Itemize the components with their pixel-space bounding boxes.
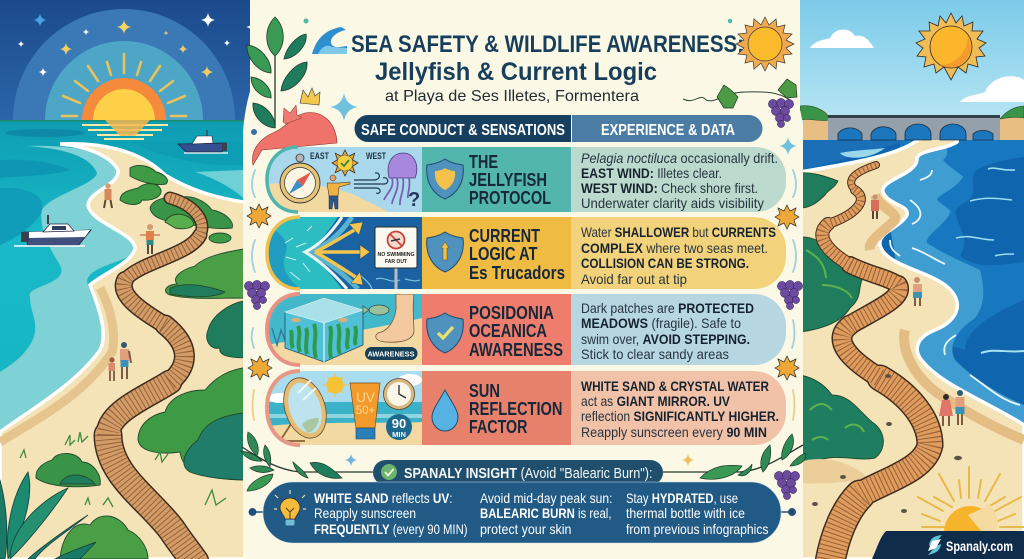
row text: Pelagia noctiluca occasionally drift. <box>581 150 778 166</box>
row 1 left arc <box>267 147 298 212</box>
panel: row 2 current logic <box>267 217 786 290</box>
awareness tag <box>365 347 418 360</box>
column heading left: SAFE CONDUCT & SENSATIONS <box>361 122 565 139</box>
sand pebbles <box>812 374 962 513</box>
row text <box>581 224 776 287</box>
insight column 3: Stay HYDRATED, use <box>626 490 738 506</box>
night sky with sun <box>0 0 260 120</box>
title line 2: Jellyfish & Current Logic <box>375 58 657 86</box>
row heading <box>469 225 565 283</box>
no swimming sign <box>375 227 417 290</box>
sand right <box>800 136 1024 559</box>
boat upper right <box>178 130 228 153</box>
icon: check circle <box>381 464 397 480</box>
icon: wave <box>312 27 347 54</box>
central cream panel <box>243 0 803 559</box>
insight column 1: Reapply sunscreen <box>314 505 416 521</box>
row 2 left arc <box>267 217 300 289</box>
side ornaments: small suns and grapes <box>244 204 803 500</box>
insight column 2 <box>480 490 612 537</box>
insight column 2: BALEARIC BURN is real, <box>480 505 612 521</box>
icon: shield gold <box>427 159 463 199</box>
icon: bare foot <box>376 294 414 342</box>
icon: top sun <box>736 17 794 71</box>
row text: Reapply sunscreen every 90 MIN <box>581 424 767 440</box>
illustration: mirror sunscreen clock <box>267 371 422 445</box>
icon: sunscreen tube <box>350 383 380 439</box>
icon: compass <box>280 154 320 203</box>
shallow water <box>0 146 135 432</box>
insight heading pill <box>373 460 663 485</box>
row heading: JELLYFISH <box>469 169 547 190</box>
column heading right: EXPERIENCE & DATA <box>601 122 735 139</box>
row heading: OCEANICA <box>469 320 547 341</box>
beach figures left <box>104 183 160 381</box>
badge: 90 min: 90 <box>392 416 406 431</box>
row text: Underwater clarity aids visibility <box>581 195 764 211</box>
daylight sky <box>800 0 1024 124</box>
shore grass tufts <box>20 432 226 507</box>
insight column 2: protect your skin <box>480 521 572 537</box>
row heading <box>469 302 563 360</box>
panel sparkles and dots <box>251 18 797 466</box>
insight heading text: SPANALY INSIGHT (Avoid "Balearic Burn"): <box>404 466 652 482</box>
icon: shield arrow <box>427 232 463 272</box>
insight column 1: FREQUENTLY (every 90 MIN) <box>314 521 468 537</box>
insight column 3 <box>626 490 768 537</box>
illustration: compass wind jellyfish: WEST <box>366 151 386 161</box>
left scene: sunset beach <box>0 0 260 559</box>
row heading: THE <box>469 151 498 172</box>
row text: WHITE SAND & CRYSTAL WATER <box>581 378 769 394</box>
sand spit <box>0 144 250 559</box>
brand badge <box>872 531 1024 559</box>
row text: Dark patches are PROTECTED <box>581 300 754 316</box>
row text: act as GIANT MIRROR. UV <box>581 393 731 409</box>
row text: EAST WIND: Illetes clear. <box>581 165 722 181</box>
title block <box>312 27 744 105</box>
row heading: LOGIC AT <box>469 243 538 264</box>
bottom olive branches <box>241 432 806 491</box>
row text: COMPLEX where two seas meet. <box>581 240 768 256</box>
sun rising bottom right <box>918 467 1024 532</box>
row heading: SUN <box>469 380 500 401</box>
left bushes <box>36 165 250 559</box>
insight column 3: thermal bottle with ice <box>626 505 745 521</box>
awareness tag: AWARENESS <box>368 350 414 358</box>
no swimming sign: NO SWIMMING <box>378 252 414 258</box>
right bushes <box>800 173 883 484</box>
icon: person pointing <box>327 175 350 209</box>
row heading: REFLECTION <box>469 398 562 419</box>
row heading: AWARENESS <box>469 339 563 360</box>
row text <box>581 150 778 211</box>
row 3 left arc <box>267 294 300 365</box>
badge: 90 min: MIN <box>392 430 406 439</box>
boat lower left <box>14 215 91 246</box>
icon: shield check <box>427 313 463 353</box>
panel: row 1 jellyfish protocol <box>267 147 786 212</box>
title line 1: SEA SAFETY & WILDLIFE AWARENESS: <box>351 31 744 58</box>
row text: Avoid far out at tip <box>581 271 687 287</box>
insight column 3: from previous infographics <box>626 521 768 537</box>
icon: three arrows <box>315 228 364 280</box>
icon: wind lines <box>354 173 388 193</box>
decorative olive branch <box>247 17 307 128</box>
row heading <box>469 151 551 208</box>
icon: standing mirror <box>276 372 334 444</box>
badge: 90 min <box>386 414 412 440</box>
table header bar <box>354 115 762 142</box>
icon: sunscreen tube: UV <box>356 390 375 405</box>
row text: reflection SIGNIFICANTLY HIGHER. <box>581 408 779 424</box>
row heading: FACTOR <box>469 416 528 437</box>
right boardwalk <box>822 165 930 559</box>
row text: WEST WIND: Check shore first. <box>581 180 758 196</box>
illustration: compass wind jellyfish <box>267 147 422 212</box>
row text <box>581 378 779 440</box>
sun with spikes <box>916 13 986 80</box>
agave plant <box>0 472 96 559</box>
title line 3: at Playa de Ses Illetes, Formentera <box>385 88 639 105</box>
row heading: Es Trucadors <box>469 262 565 283</box>
question mark: ? <box>408 189 420 211</box>
insight column 2: Avoid mid-day peak sun: <box>480 490 612 506</box>
icon: jellyfish <box>384 153 417 205</box>
wind direction labels: EAST <box>310 151 329 161</box>
icon: fish <box>363 305 389 315</box>
glass tank with seagrass <box>285 298 363 362</box>
panel: row 3 posidonia <box>267 294 786 365</box>
icon: sunscreen tube: 50+ <box>356 405 376 417</box>
row heading: POSIDONIA <box>469 302 554 323</box>
icon: vine and grapes <box>683 79 797 128</box>
icon: sun with check <box>332 150 358 176</box>
insight column 1 <box>314 490 468 537</box>
right scene: bay with bridge <box>800 0 1024 559</box>
row heading: CURRENT <box>469 225 541 246</box>
row text: Water SHALLOWER but CURRENTS <box>581 224 776 240</box>
connector dots <box>249 509 795 515</box>
illustration: tank and foot <box>267 294 422 365</box>
row text: COLLISION CAN BE STRONG. <box>581 255 749 271</box>
sea right <box>800 140 1024 440</box>
cliffs <box>800 106 1024 140</box>
row text: swim over, AVOID STEPPING. <box>581 331 750 347</box>
row text: MEADOWS (fragile). Safe to <box>581 315 741 331</box>
icon: lightbulb <box>274 490 306 526</box>
red blob and crown <box>252 88 337 165</box>
insight column 1: WHITE SAND reflects UV: <box>314 490 452 506</box>
no swimming sign: FAR OUT <box>385 259 408 265</box>
row heading: PROTOCOL <box>469 187 551 208</box>
side arc marks <box>252 170 796 420</box>
panel: row 4 sun reflection <box>267 371 786 445</box>
bridge <box>828 115 1000 140</box>
row text <box>581 300 754 362</box>
icon: clock <box>384 378 414 410</box>
clouds <box>810 29 1024 102</box>
icon: small sun <box>323 373 347 397</box>
row heading <box>469 380 562 437</box>
icon: water drop <box>432 390 458 431</box>
panel: insight box <box>263 482 781 543</box>
sea <box>0 120 244 372</box>
row text: Stick to clear sandy areas <box>581 346 729 362</box>
beach figures right <box>871 194 964 426</box>
illustration: currents and sign <box>267 217 422 290</box>
left boardwalk <box>108 198 202 559</box>
row 4 left arc <box>267 371 300 445</box>
